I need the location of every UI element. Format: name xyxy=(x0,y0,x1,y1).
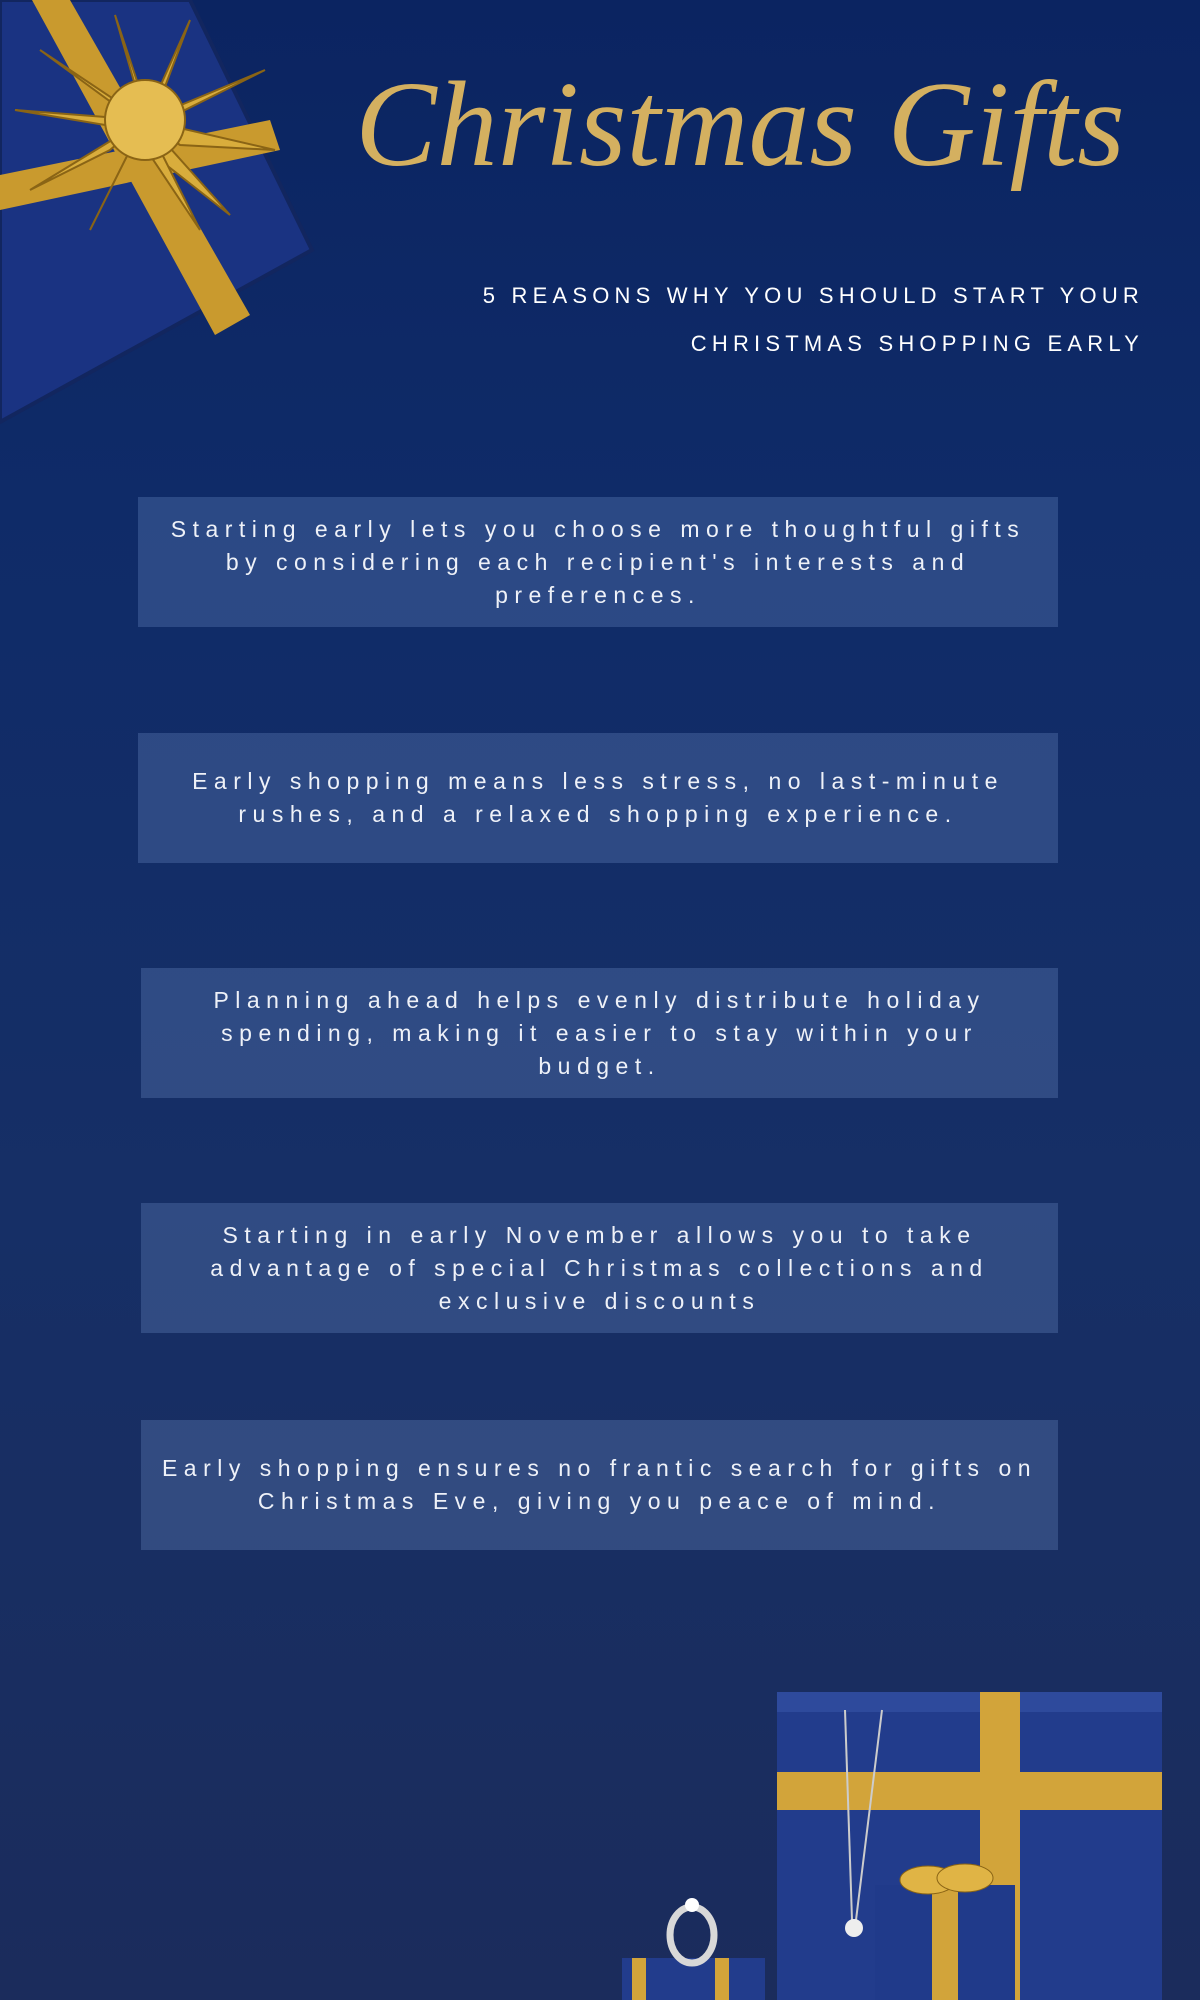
reason box 2 xyxy=(138,733,1058,863)
reason box 4: Starting in early November allows you to take advantage of special Christmas collections and exclusive discounts xyxy=(210,1222,989,1314)
reason box 1: Starting early lets you choose more thoughtful gifts by considering each recipient's interests and preferences. xyxy=(171,516,1025,608)
reason box 4 xyxy=(141,1203,1058,1333)
reason box 1 xyxy=(138,497,1058,627)
icon: bottom gifts with jewelry xyxy=(622,1692,1162,2000)
reason box 2: Early shopping means less stress, no last-minute rushes, and a relaxed shopping experience. xyxy=(192,768,1004,827)
subtitle: 5 REASONS WHY YOU SHOULD START YOUR xyxy=(483,283,1144,308)
reason box 5 xyxy=(141,1420,1058,1550)
reason box 5: Early shopping ensures no frantic search for gifts on Christmas Eve, giving you peace of mind. xyxy=(162,1455,1037,1514)
subtitle: CHRISTMAS SHOPPING EARLY xyxy=(691,331,1144,356)
reason box 3: Planning ahead helps evenly distribute holiday spending, making it easier to stay within your budget. xyxy=(213,986,986,1078)
title: Christmas Gifts xyxy=(355,57,1125,192)
reason box 3 xyxy=(141,968,1058,1098)
subtitle xyxy=(483,283,1144,356)
icon: top-left gift box xyxy=(0,0,309,418)
